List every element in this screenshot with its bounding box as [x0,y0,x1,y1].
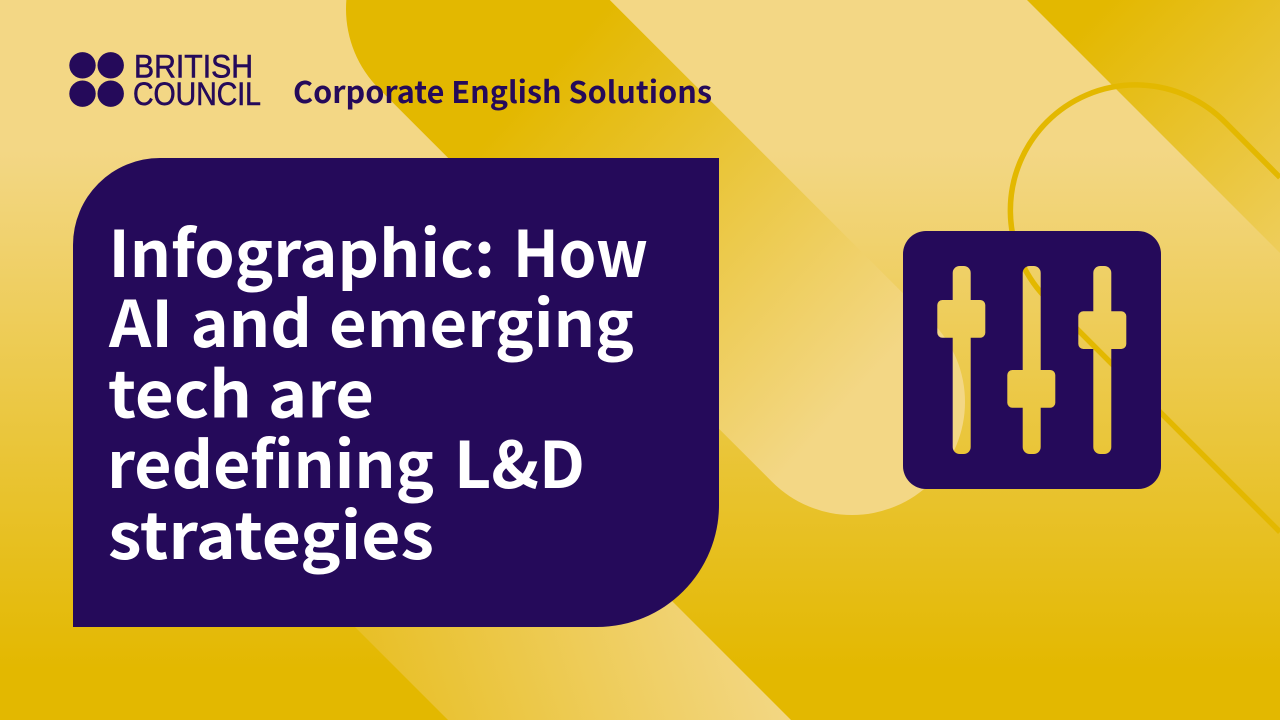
title: Infographic: [108,204,495,296]
panel: title [73,158,719,627]
diagonal band: bottom centre [300,549,791,720]
rounded outline shape [1010,85,1280,532]
title: and [190,274,312,366]
heading: Corporate English Solutions: Corporate English Solutions [293,68,712,112]
title [107,204,648,578]
title: emerging [329,274,634,366]
title: redefining [107,415,434,507]
diagonal band: top right [1027,0,1280,253]
logo wordmark: COUNCIL [133,76,261,112]
logo: British Council [69,48,261,112]
logo wordmark: BRITISH [134,48,253,84]
logo wordmark [133,48,261,112]
title: strategies [108,486,434,578]
title: tech [108,344,252,436]
title: L&D [454,415,585,507]
title: are [268,344,374,436]
title: How [513,204,648,296]
logo mark: four dots [69,52,124,107]
icon: sliders [903,231,1161,489]
title: AI [108,274,173,366]
diagonal band: top centre [459,9,852,402]
